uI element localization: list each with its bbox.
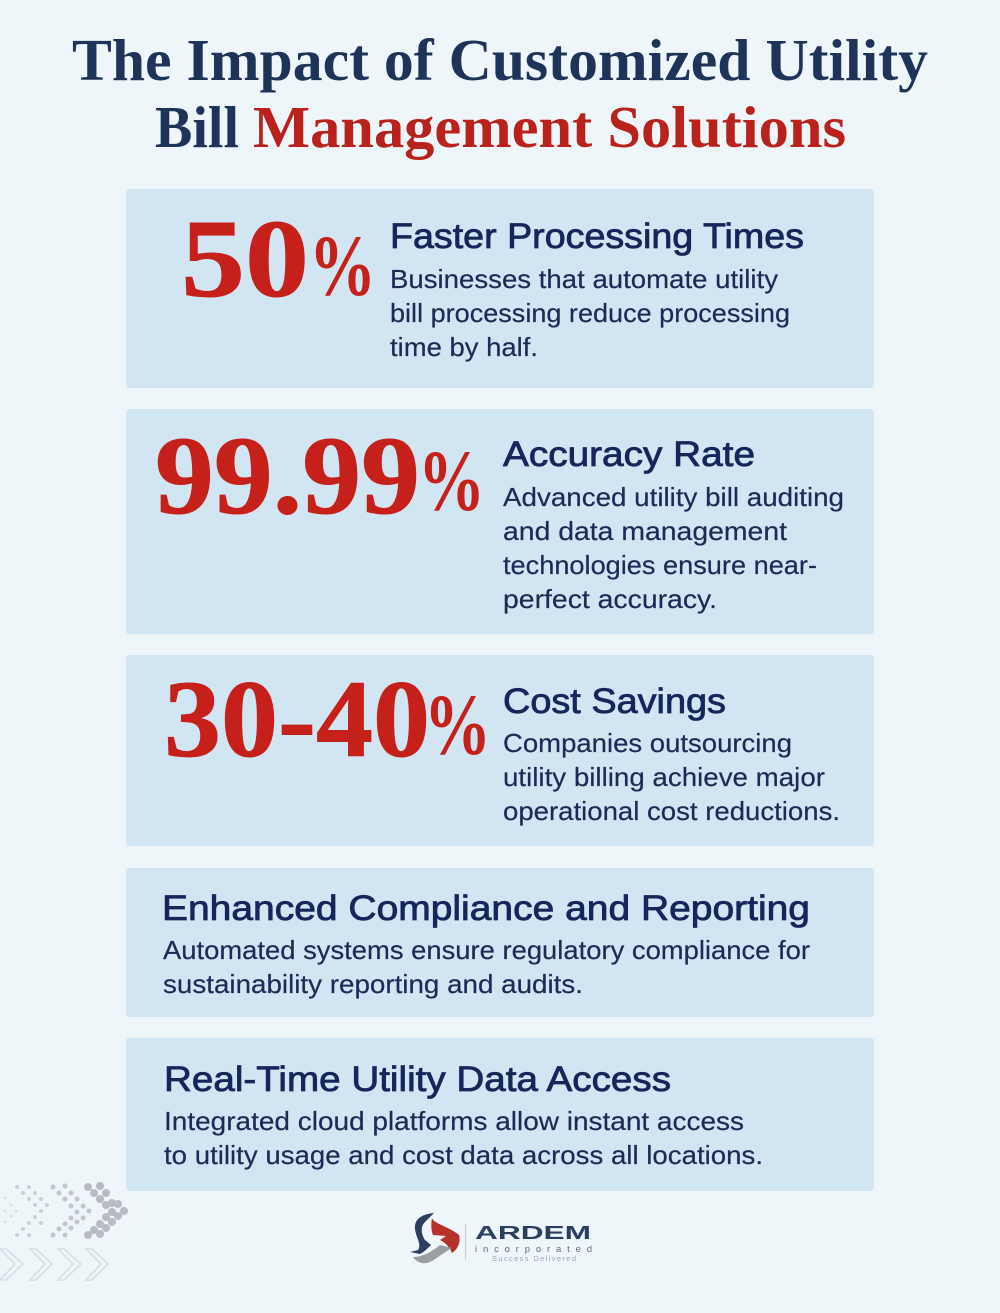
heading: accuracy rate: Accuracy Rate bbox=[503, 435, 755, 474]
icon: ARDEM star mark bbox=[410, 1213, 460, 1263]
heading: enhanced compliance: Enhanced Compliance and Reporting bbox=[162, 889, 810, 928]
wordmark: ARDEM bbox=[475, 1223, 591, 1243]
decoration: outline chevrons bbox=[0, 1249, 108, 1280]
stat: 50% bbox=[181, 198, 376, 321]
tagline: success delivered: Success Delivered bbox=[492, 1254, 576, 1263]
text: accuracy description: Advanced utility bill auditing bbox=[503, 482, 844, 512]
panel: faster processing times bbox=[126, 189, 874, 388]
stat: 50%: 50 bbox=[181, 198, 309, 321]
text: accuracy description: technologies ensure near- bbox=[503, 550, 817, 580]
text: compliance description: sustainability reporting and audits. bbox=[163, 969, 583, 999]
text: cost savings description: Companies outsourcing bbox=[503, 728, 792, 758]
text: accuracy description bbox=[503, 482, 844, 614]
panel: enhanced compliance and reporting bbox=[126, 868, 874, 1017]
text: real-time description: Integrated cloud platforms allow instant access bbox=[164, 1106, 744, 1136]
heading: faster processing times: Faster Processing Times bbox=[390, 217, 804, 256]
heading: real-time data access: Real-Time Utility Data Access bbox=[164, 1060, 671, 1099]
text: accuracy description: and data management bbox=[503, 516, 788, 546]
text: compliance description bbox=[163, 935, 810, 999]
title: The Impact of Customized Utility bbox=[72, 27, 928, 93]
stat: 99.99%: 99.99 bbox=[155, 415, 420, 538]
text: accuracy description: perfect accuracy. bbox=[503, 584, 717, 614]
text: cost savings description: utility billing achieve major bbox=[503, 762, 825, 792]
text: faster processing description: Businesses that automate utility bbox=[390, 264, 778, 294]
text: real-time description bbox=[164, 1106, 763, 1170]
panel: real-time utility data access bbox=[126, 1038, 874, 1191]
title bbox=[72, 27, 928, 160]
text: faster processing description: time by half. bbox=[390, 332, 538, 362]
heading: cost savings: Cost Savings bbox=[503, 682, 726, 721]
decoration: dotted chevrons bbox=[4, 1182, 128, 1239]
stat: 30-40%: % bbox=[424, 676, 491, 773]
title: Management Solutions bbox=[253, 94, 846, 160]
divider bbox=[465, 1224, 466, 1260]
stat: 99.99%: % bbox=[418, 432, 485, 529]
text: compliance description: Automated systems ensure regulatory compliance for bbox=[163, 935, 810, 965]
text: cost savings description bbox=[503, 728, 840, 826]
stat: 30-40%: 30-40 bbox=[164, 658, 430, 780]
tagline: incorporated: incorporated bbox=[475, 1244, 592, 1255]
text: faster processing description: bill processing reduce processing bbox=[390, 298, 790, 328]
text: real-time description: to utility usage and cost data across all locations. bbox=[164, 1140, 763, 1170]
text: cost savings description: operational cost reductions. bbox=[503, 796, 840, 826]
stat: 50%: % bbox=[309, 217, 376, 314]
panel: accuracy rate bbox=[126, 409, 874, 634]
text: faster processing description bbox=[390, 264, 790, 362]
logo: ARDEM incorporated bbox=[410, 1213, 592, 1263]
panel: cost savings bbox=[126, 655, 874, 846]
title: Bill bbox=[155, 94, 239, 160]
